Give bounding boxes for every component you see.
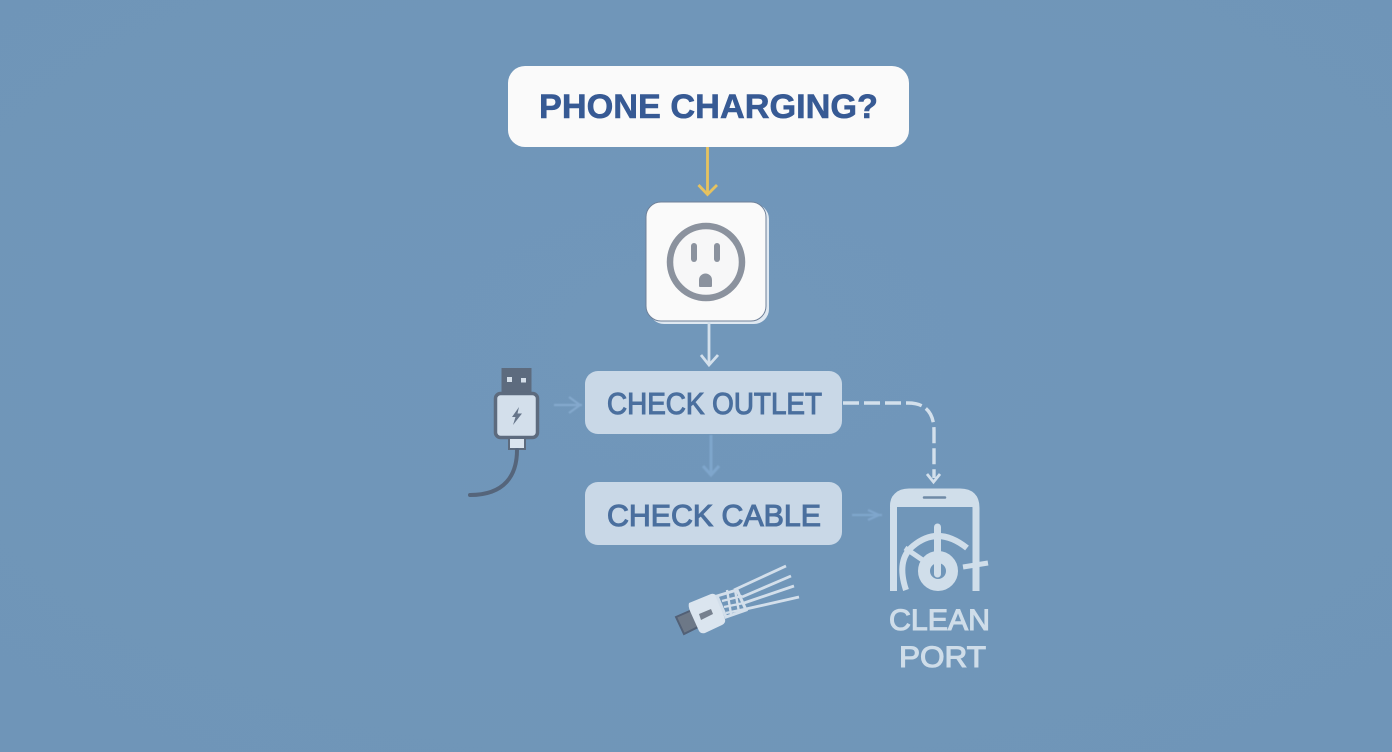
arrow: dashed check outlet to clean port: [843, 403, 940, 482]
arrow: outlet to check outlet: [701, 322, 718, 365]
box: check outlet: CHECK OUTLET: [607, 387, 822, 421]
arrow: title to outlet icon: [698, 147, 717, 194]
label: clean port: PORT: [899, 641, 986, 674]
box: check cable: [585, 482, 842, 545]
icon: USB cable: [470, 368, 538, 495]
arrow: check outlet to check cable: [703, 435, 719, 475]
title box: Phone Charging?: PHONE CHARGING?: [539, 88, 878, 126]
icon: phone with port gauge: [890, 490, 988, 591]
arrow: cable to check outlet: [554, 397, 582, 413]
icon: frayed cable: [676, 566, 799, 634]
box: check cable: CHECK CABLE: [607, 499, 821, 533]
title box: Phone Charging?: [508, 66, 909, 147]
arrow: check cable to clean port: [852, 510, 882, 520]
label: clean port: [889, 604, 990, 674]
box: check outlet: [585, 371, 842, 434]
icon: wall outlet: [646, 202, 769, 324]
label: clean port: CLEAN: [889, 604, 990, 637]
